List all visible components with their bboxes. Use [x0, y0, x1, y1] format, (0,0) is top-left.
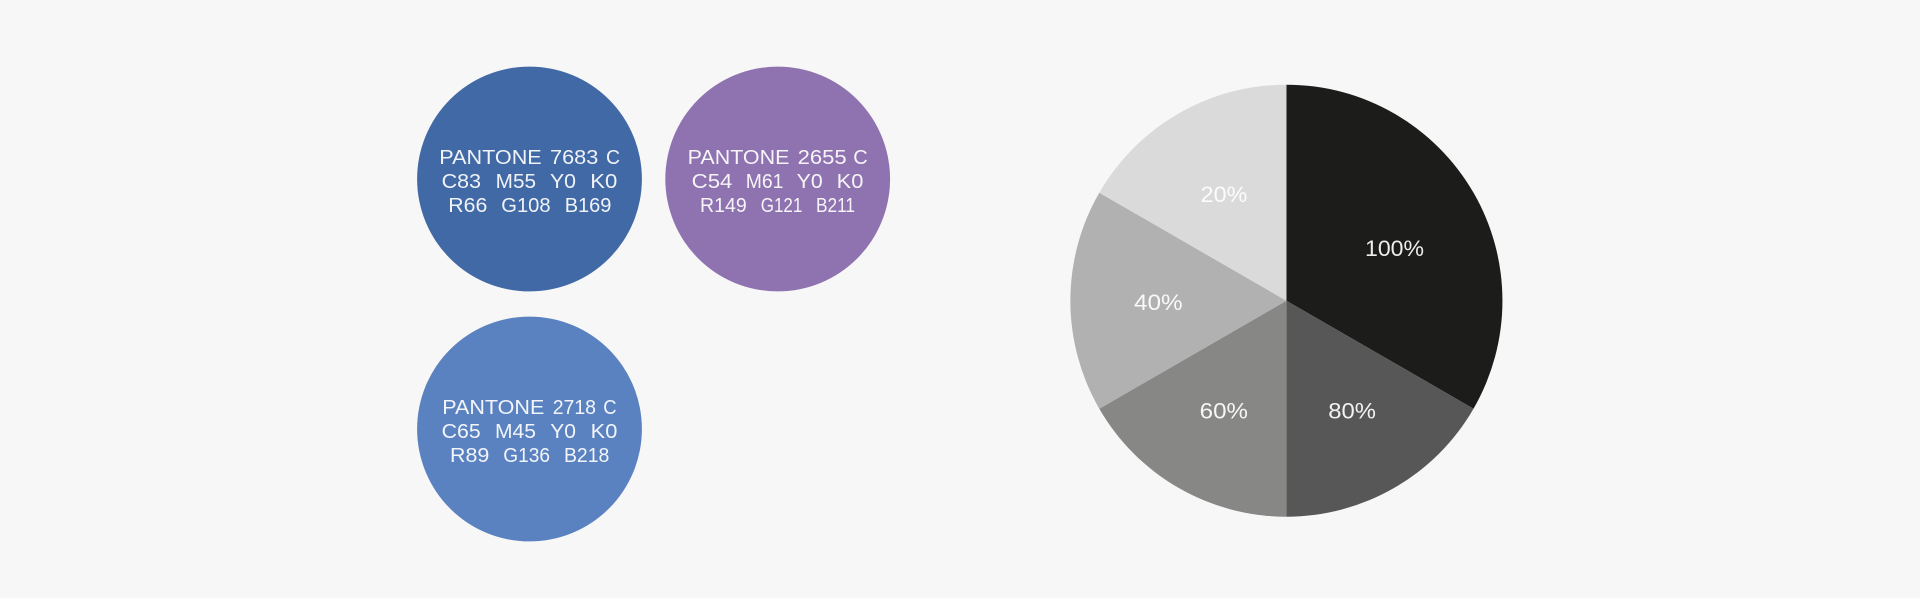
swatch: Pantone 2718 C: B218 — [564, 445, 609, 467]
swatch: Pantone 7683 C: C — [606, 147, 620, 169]
swatch: Pantone 2655 C: Y0 — [797, 171, 823, 193]
swatch: Pantone 2718 C: C65 — [442, 421, 481, 443]
slice: 60%: 60% — [1200, 398, 1248, 423]
swatch: Pantone 2718 C: M45 — [495, 421, 536, 443]
swatch: Pantone 7683 C: R66 — [448, 195, 487, 217]
swatch: Pantone 2655 C: M61 — [746, 171, 783, 193]
slice: 80%: 80% — [1328, 398, 1376, 423]
swatch: Pantone 2718 C: K0 — [591, 421, 617, 443]
swatch: Pantone 2655 C: C — [853, 147, 868, 169]
swatch: Pantone 2718 C: PANTONE — [442, 397, 544, 419]
swatch: Pantone 7683 C: 7683 — [550, 147, 598, 169]
swatch: Pantone 7683 C: Y0 — [550, 171, 576, 193]
swatch: Pantone 2718 C: Y0 — [550, 421, 576, 443]
swatch: Pantone 2655 C: G121 — [761, 195, 802, 217]
swatch: Pantone 7683 C: B169 — [565, 195, 611, 217]
swatch: Pantone 7683 C: PANTONE — [439, 147, 542, 169]
slice: 80% — [1286, 301, 1474, 517]
swatch: Pantone 2655 C: C54 — [692, 171, 732, 193]
swatch: Pantone 2718 C: R89 — [450, 445, 489, 467]
slice: 40%: 40% — [1134, 290, 1183, 315]
swatch: Pantone 2655 C: PANTONE — [688, 147, 789, 169]
swatch: Pantone 2718 C: G136 — [503, 445, 550, 467]
swatch: Pantone 2718 C: C — [603, 397, 617, 419]
slice: 20% — [1099, 85, 1286, 301]
panel: colour swatches — [417, 67, 890, 541]
swatch: Pantone 7683 C: K0 — [590, 171, 617, 193]
swatch: Pantone 2718 C: 2718 — [553, 397, 596, 419]
swatch: Pantone 7683 C — [417, 67, 642, 291]
slice: 100%: 100% — [1365, 236, 1424, 261]
swatch: Pantone 2655 C — [665, 67, 890, 291]
slice: 40% — [1070, 193, 1286, 409]
swatch: Pantone 2655 C: 2655 — [798, 147, 847, 169]
swatch: Pantone 7683 C: G108 — [501, 195, 551, 217]
slice: 100% — [1286, 85, 1502, 409]
slice: 60% — [1099, 301, 1286, 517]
swatch: Pantone 7683 C: C83 — [442, 171, 481, 193]
swatch: Pantone 7683 C: M55 — [496, 171, 536, 193]
swatch: Pantone 2718 C — [417, 317, 642, 541]
swatch: Pantone 2655 C: B211 — [816, 195, 855, 217]
pie chart: tint percentages — [1070, 85, 1502, 517]
swatch: Pantone 2655 C: R149 — [700, 195, 747, 217]
slice: 20%: 20% — [1201, 182, 1247, 207]
swatch: Pantone 2655 C: K0 — [837, 171, 863, 193]
